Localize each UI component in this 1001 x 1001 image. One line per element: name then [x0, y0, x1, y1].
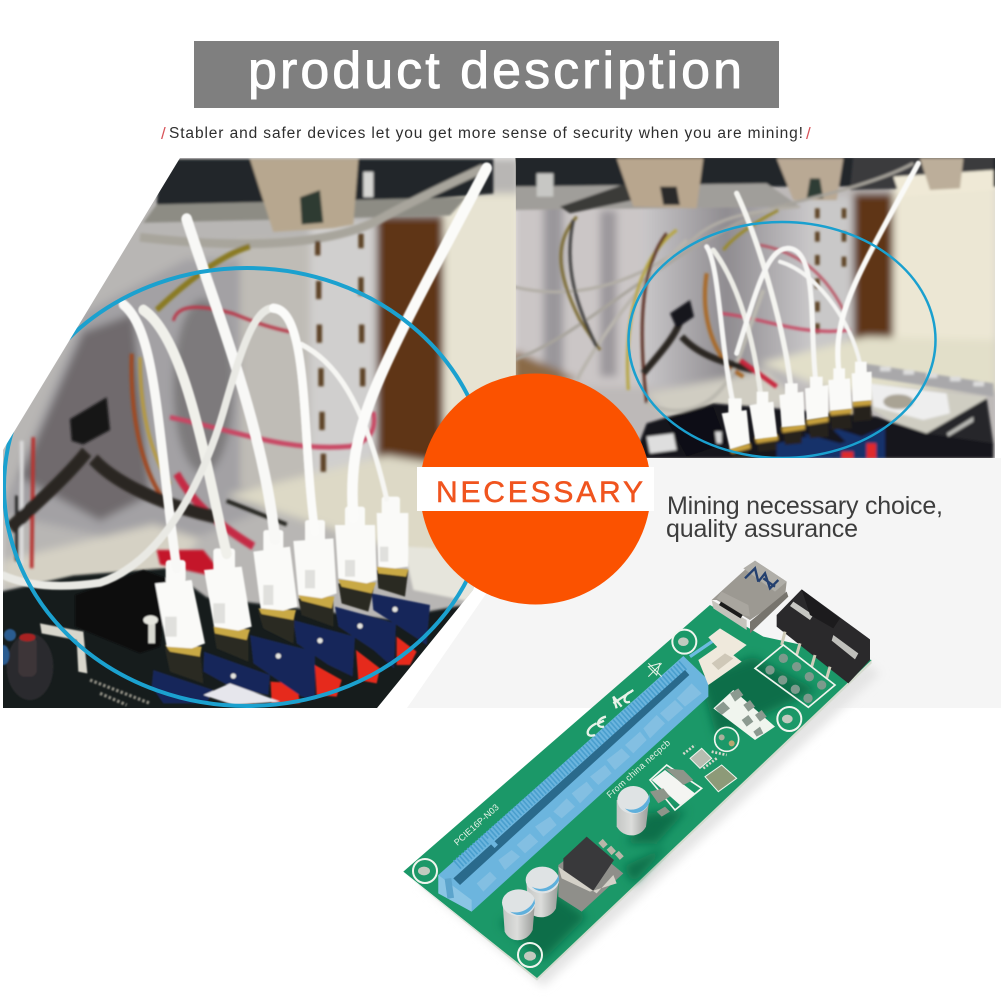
heading: product description: product description	[248, 42, 742, 100]
heatsink	[75, 570, 167, 653]
dark cable and connector	[10, 452, 217, 528]
photo: left rig close-up	[0, 157, 520, 714]
MOSFET	[558, 837, 624, 912]
solder pad block	[755, 645, 835, 707]
white cables and plugs	[707, 163, 918, 449]
socket connectors	[165, 570, 408, 683]
top board and bracket	[157, 159, 493, 206]
black 6-pin power socket	[777, 589, 870, 683]
SMD resistor pads	[713, 688, 775, 740]
white power connector	[690, 628, 747, 685]
panel: light grey backdrop	[407, 458, 1001, 708]
white USB cables	[3, 168, 487, 586]
title banner	[194, 41, 779, 108]
green PCB	[403, 605, 872, 978]
red sata	[740, 360, 777, 387]
small capacitor footprint	[715, 727, 739, 751]
board shadow	[420, 663, 880, 987]
large inductor pads	[650, 765, 702, 817]
motherboard	[633, 403, 993, 458]
motherboard	[0, 568, 467, 714]
product: PCIe riser card	[403, 561, 880, 987]
photo: right rig overview	[500, 157, 1000, 463]
mounting holes	[413, 630, 801, 967]
perforated post holes	[315, 234, 365, 472]
certification marks	[588, 663, 662, 736]
silkscreen text: From china necpcb	[605, 738, 672, 800]
top boards	[513, 157, 1000, 187]
perforated post holes	[815, 208, 846, 333]
shaded traces	[500, 657, 817, 960]
callout ring: right photo	[628, 222, 936, 458]
silkscreen text: PCIE16P-N03	[452, 802, 501, 847]
blue PCIe slot	[438, 656, 708, 912]
electrolytic capacitors	[502, 786, 650, 940]
USB 3.0 port	[712, 561, 788, 633]
HDD	[867, 383, 987, 450]
tagline: Stabler and safer devices let you get more sense of security when you are mining!	[169, 125, 803, 142]
badge label: NECESSARY	[436, 476, 643, 509]
silkscreen text	[452, 738, 672, 847]
brackets	[617, 158, 703, 208]
tagline: /	[806, 124, 811, 143]
red latch background	[155, 548, 214, 576]
board components	[7, 633, 53, 700]
paper shelf right	[403, 546, 500, 601]
slot groove	[453, 670, 689, 885]
text: mining necessary choice: quality assurance	[666, 515, 858, 543]
callout ring: left photo	[4, 268, 490, 706]
text: mining necessary choice	[666, 492, 943, 543]
red latches	[271, 637, 417, 703]
USB plugs	[155, 497, 408, 648]
tagline: /	[161, 124, 166, 143]
coloured wires	[17, 246, 374, 568]
dark cable	[643, 317, 753, 373]
chip cluster	[683, 745, 737, 792]
riser cards	[152, 593, 430, 703]
loose wires	[513, 163, 913, 411]
slot ribs	[457, 665, 683, 865]
board edge	[403, 660, 872, 981]
badge: necessary circle	[417, 374, 654, 604]
text: mining necessary choice: Mining necessary choice,	[667, 492, 943, 520]
